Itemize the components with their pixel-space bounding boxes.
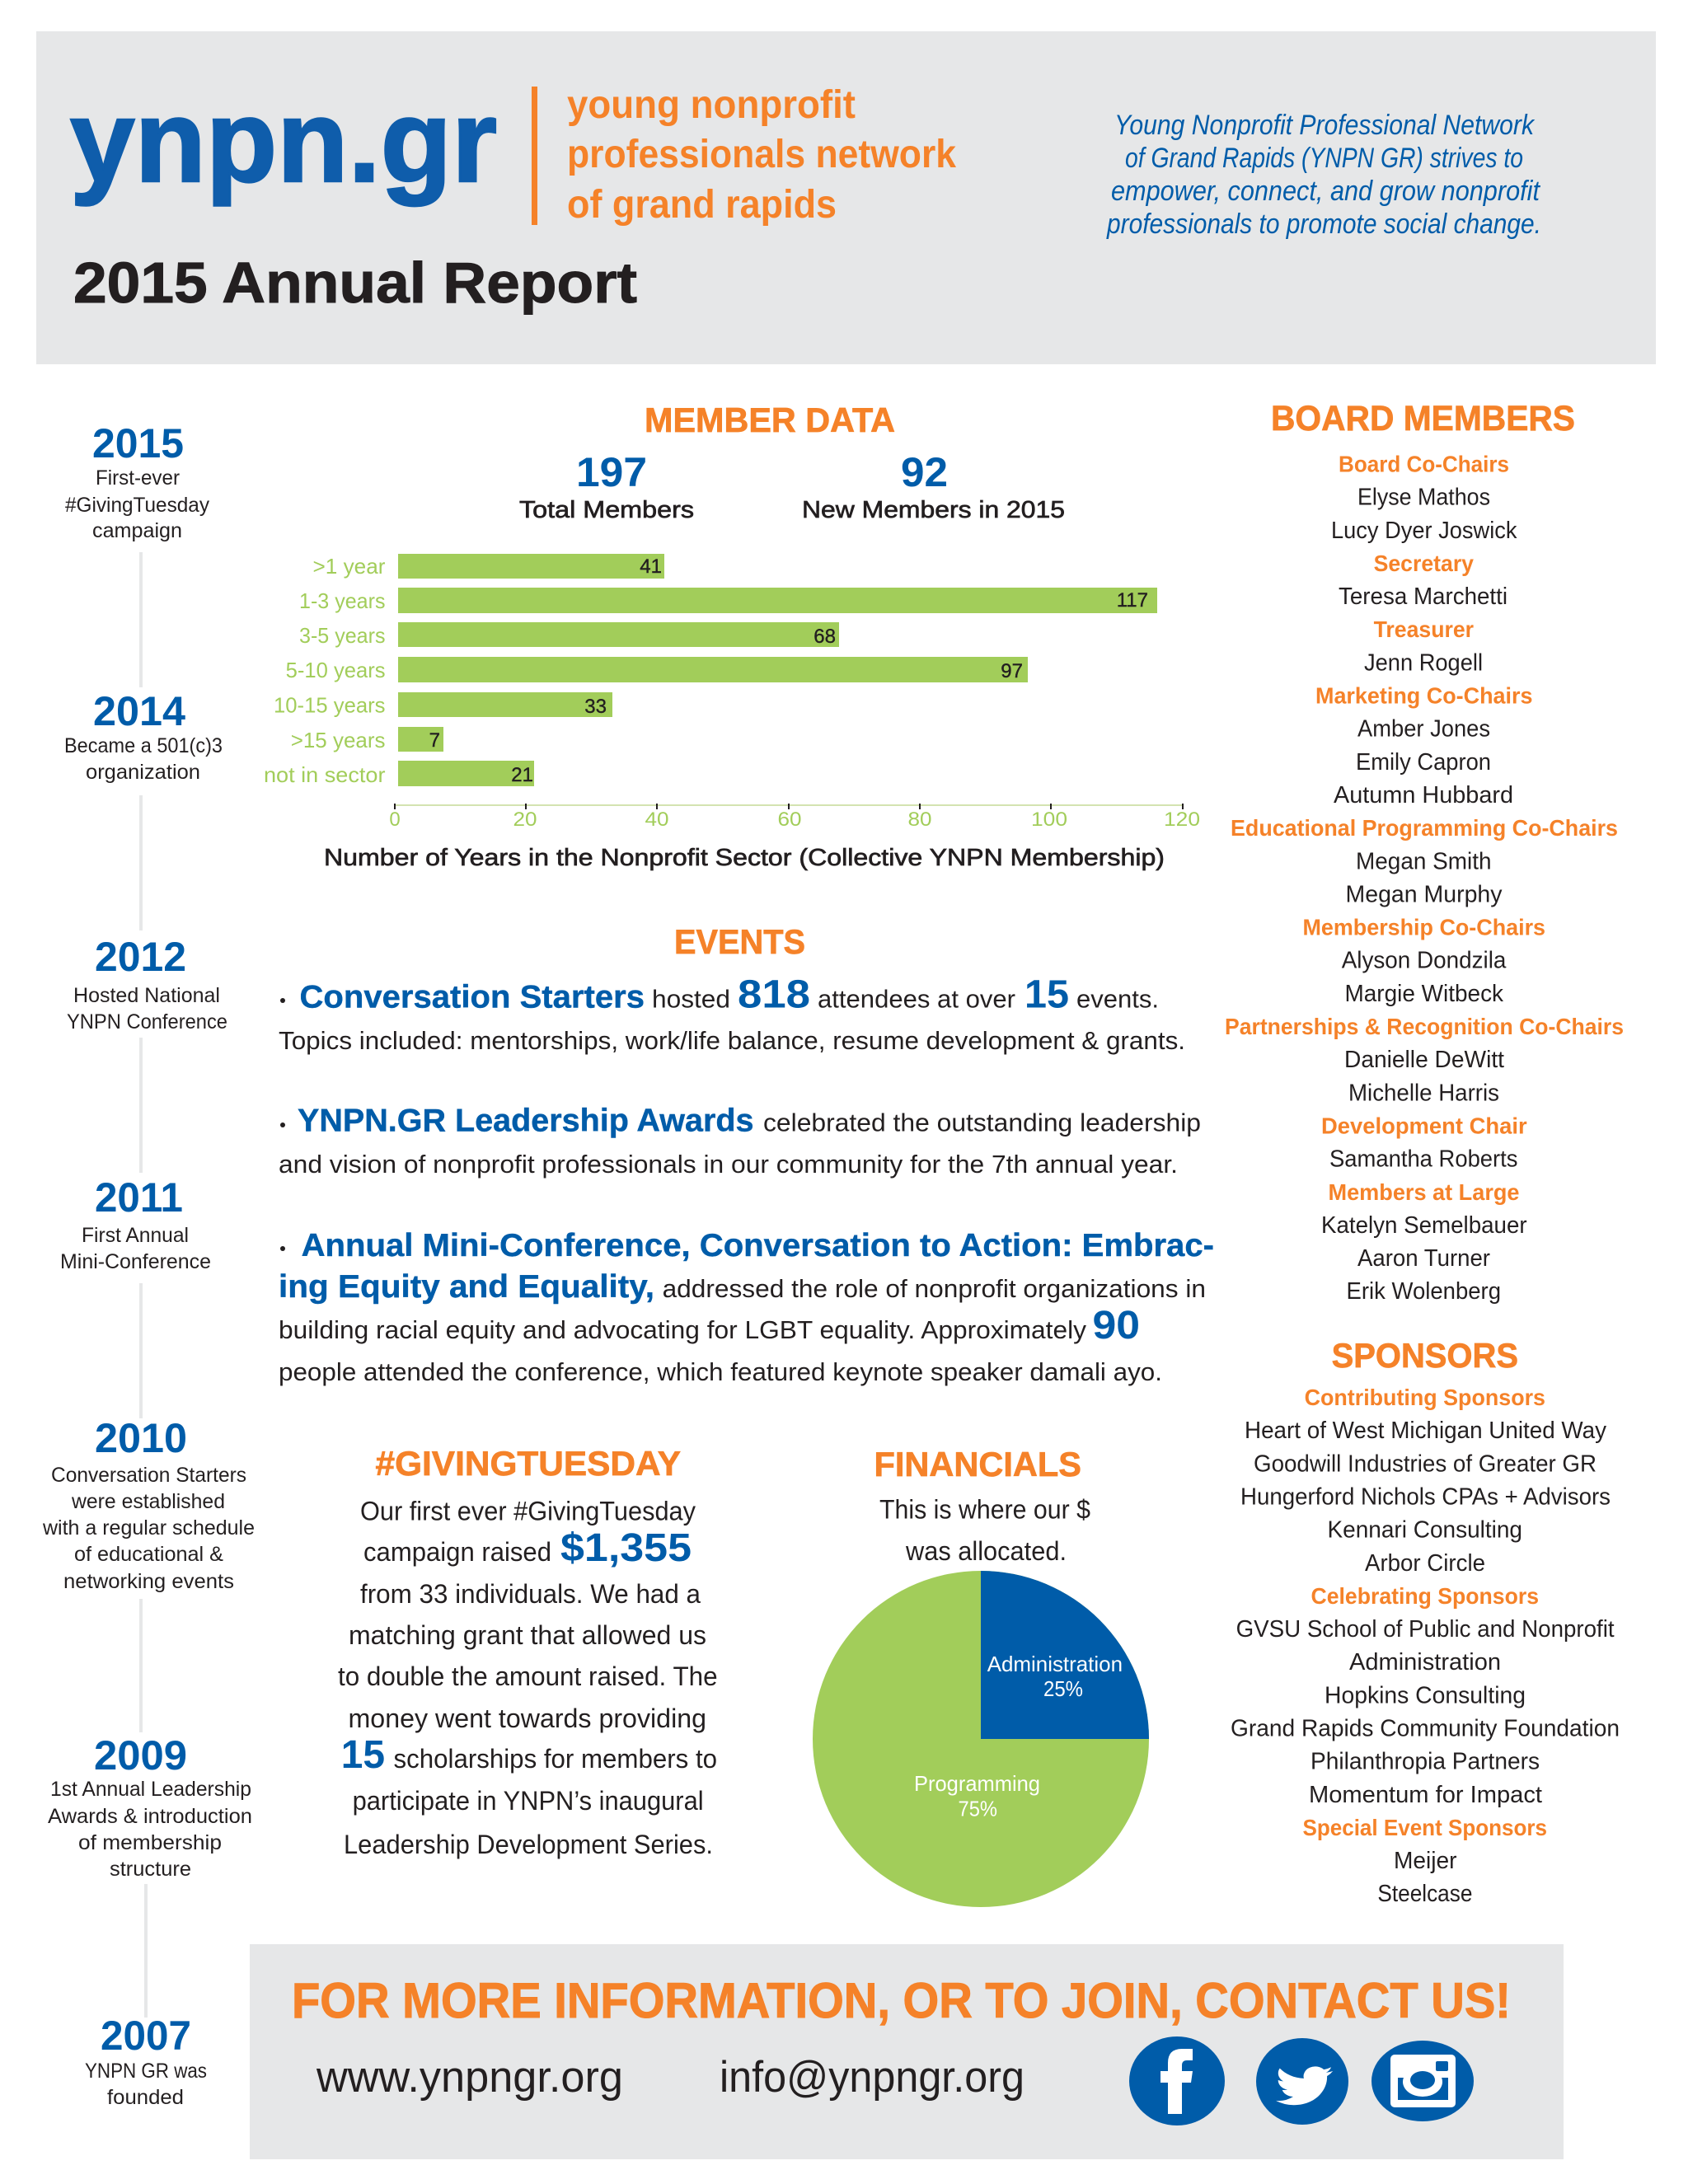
stat: total members: Total Members — [519, 497, 694, 523]
timeline 2011: Mini-Conference — [60, 1250, 211, 1273]
board list: Jenn Rogell — [1364, 649, 1483, 676]
mission statement — [1106, 110, 1541, 240]
bar chart — [264, 554, 1200, 871]
timeline 2010: of educational & — [74, 1543, 223, 1566]
giving tuesday body text: money went towards providing — [348, 1704, 706, 1733]
report title: 2015 Annual Report — [73, 251, 637, 315]
board list: Erik Wolenberg — [1347, 1278, 1501, 1305]
panel: contact footer — [250, 1944, 1564, 2159]
giving tuesday body text: from 33 individuals. We had a — [360, 1579, 701, 1609]
heading: financials: FINANCIALS — [874, 1445, 1081, 1483]
bar labels: 10-15 years — [274, 692, 386, 717]
x axis — [389, 804, 1200, 831]
bar values: 21 — [511, 764, 533, 786]
x axis: 40 — [645, 808, 669, 831]
event: mini-conference: ing Equity and Equality, — [279, 1269, 654, 1305]
event: leadership awards: YNPN.GR Leadership Awards — [298, 1103, 753, 1139]
stat: new members: New Members in 2015 — [802, 497, 1065, 523]
timeline 2009: Awards & introduction — [48, 1805, 252, 1828]
board list: Membership Co-Chairs — [1302, 915, 1545, 940]
x axis: 120 — [1164, 808, 1200, 831]
panel: giving tuesday — [338, 1444, 718, 1859]
x axis: 60 — [778, 808, 801, 831]
board list — [1225, 452, 1624, 1305]
board list: Elyse Mathos — [1357, 485, 1490, 511]
contact heading: FOR MORE INFORMATION, OR TO JOIN, CONTACT US! — [292, 1973, 1511, 2028]
bar labels: not in sector — [264, 762, 386, 787]
x axis: 80 — [908, 808, 931, 831]
heading: events: EVENTS — [674, 922, 805, 961]
timeline 2009: structure — [110, 1858, 191, 1881]
timeline 2011: 2011 — [95, 1174, 183, 1221]
icon: twitter — [1256, 2038, 1348, 2125]
board list: Members at Large — [1329, 1179, 1520, 1205]
timeline 2012: Hosted National — [73, 984, 220, 1007]
timeline 2014: organization — [86, 761, 200, 784]
timeline 2007: YNPN GR was — [85, 2060, 207, 2083]
financials intro text: was allocated. — [905, 1536, 1067, 1566]
pie label: administration: 25% — [1043, 1676, 1083, 1701]
sponsor list: Goodwill Industries of Greater GR — [1254, 1451, 1597, 1477]
giving tuesday body text: Our first ever #GivingTuesday — [360, 1497, 696, 1526]
sponsor list: Contributing Sponsors — [1305, 1385, 1545, 1410]
sponsor list: Administration — [1349, 1649, 1501, 1675]
sponsor list: Philanthropia Partners — [1311, 1749, 1540, 1775]
timeline 2010: were established — [71, 1490, 225, 1513]
logo wordmark: ynpn.gr — [70, 76, 497, 207]
sponsor list: Momentum for Impact — [1309, 1782, 1542, 1808]
sponsor list: Kennari Consulting — [1327, 1517, 1522, 1544]
sponsor list: Hungerford Nichols CPAs + Advisors — [1240, 1483, 1611, 1510]
giving tuesday body text: participate in YNPN’s inaugural — [353, 1786, 704, 1816]
board list: Lucy Dyer Joswick — [1331, 518, 1517, 544]
timeline 2012: YNPN Conference — [67, 1010, 227, 1033]
icon: facebook — [1129, 2036, 1225, 2125]
bar values: 68 — [814, 626, 836, 648]
timeline 2015: #GivingTuesday — [65, 494, 209, 517]
heading: board members: BOARD MEMBERS — [1271, 399, 1575, 438]
board list: Partnerships & Recognition Co-Chairs — [1225, 1014, 1624, 1039]
event: conversation starters: Topics included: mentorships, work/life balance, resume development & grants. — [279, 1026, 1185, 1055]
bars — [398, 554, 1157, 786]
timeline 2015: First-ever — [96, 466, 180, 490]
giving tuesday body text: 15 — [341, 1733, 385, 1777]
board list: Teresa Marchetti — [1339, 583, 1507, 610]
event: conversation starters: attendees at over — [818, 984, 1015, 1014]
timeline 2007: founded — [107, 2086, 184, 2109]
bar labels: >15 years — [291, 728, 386, 752]
timeline 2012: 2012 — [95, 934, 186, 980]
board list: Amber Jones — [1357, 716, 1490, 743]
heading: giving tuesday: #GIVINGTUESDAY — [376, 1444, 681, 1483]
pie label: administration: Administration — [987, 1652, 1123, 1676]
panel: member data — [264, 401, 1200, 871]
mission statement: empower, connect, and grow nonprofit — [1111, 176, 1540, 207]
timeline 2007 — [85, 2013, 207, 2109]
board list: Aaron Turner — [1357, 1245, 1490, 1272]
sponsor list: Special Event Sponsors — [1302, 1815, 1547, 1840]
timeline 2010: Conversation Starters — [51, 1464, 246, 1487]
email: info@ynpngr.org — [720, 2053, 1025, 2102]
mission statement: Young Nonprofit Professional Network — [1114, 110, 1536, 141]
board list: Megan Smith — [1356, 848, 1492, 874]
pie label: administration — [987, 1652, 1123, 1701]
stat: new members — [802, 449, 1065, 523]
event: mini-conference — [279, 1228, 1214, 1386]
event: leadership awards: celebrated the outstanding leadership — [763, 1108, 1201, 1137]
bar values: 41 — [640, 555, 662, 578]
event: mini-conference: Annual Mini-Conference, Conversation to Action: Embrac- — [302, 1228, 1214, 1263]
event: mini-conference: building racial equity and advocating for LGBT equality. Approximately — [279, 1315, 1087, 1344]
timeline 2011 — [60, 1174, 211, 1273]
event: conversation starters: events. — [1076, 984, 1159, 1014]
giving tuesday body text: campaign raised — [363, 1537, 551, 1567]
timeline 2015: 2015 — [92, 420, 184, 466]
stat: total members: 197 — [576, 449, 647, 495]
bar labels — [264, 554, 386, 787]
pie chart — [813, 1571, 1149, 1907]
financials intro text: This is where our $ — [879, 1495, 1090, 1525]
timeline 2015: campaign — [92, 519, 182, 542]
bar labels: 3-5 years — [299, 623, 386, 648]
pie label: programming: 75% — [958, 1797, 997, 1821]
timeline 2012 — [67, 934, 227, 1033]
sponsor list: Grand Rapids Community Foundation — [1231, 1716, 1620, 1742]
sponsor list: Meijer — [1394, 1848, 1457, 1874]
timeline 2014: 2014 — [93, 688, 185, 734]
timeline 2011: First Annual — [82, 1224, 189, 1247]
board list: Development Chair — [1321, 1113, 1527, 1139]
bar values: 7 — [429, 729, 440, 752]
board list: Michelle Harris — [1348, 1080, 1499, 1106]
giving tuesday body text: matching grant that allowed us — [349, 1620, 706, 1650]
timeline 2007: 2007 — [101, 2013, 191, 2059]
panel: financials — [813, 1445, 1149, 1907]
panel: events — [279, 922, 1214, 1386]
timeline 2015 — [65, 420, 209, 542]
pie label: programming: Programming — [914, 1771, 1040, 1796]
board list: Autumn Hubbard — [1334, 782, 1513, 808]
sponsor list: Heart of West Michigan United Way — [1245, 1418, 1606, 1444]
timeline 2010 — [42, 1415, 255, 1593]
timeline 2010: networking events — [63, 1570, 234, 1593]
giving tuesday body text: $1,355 — [560, 1526, 692, 1570]
timeline — [42, 420, 255, 2109]
bar labels: 1-3 years — [299, 588, 386, 613]
board list: Secretary — [1374, 551, 1474, 576]
bar labels: >1 year — [313, 554, 386, 579]
mission statement: of Grand Rapids (YNPN GR) strives to — [1125, 143, 1523, 174]
timeline 2010: 2010 — [95, 1415, 187, 1461]
pie label: programming — [914, 1771, 1040, 1821]
event: conversation starters: Conversation Starters — [300, 979, 645, 1015]
panel: sponsors — [1231, 1336, 1620, 1907]
sponsor list: Hopkins Consulting — [1325, 1682, 1526, 1708]
heading: member data: MEMBER DATA — [645, 401, 895, 439]
bar values: 97 — [1001, 660, 1023, 682]
board list: Katelyn Semelbauer — [1321, 1212, 1527, 1239]
stat: new members: 92 — [901, 449, 948, 495]
board list: Samantha Roberts — [1329, 1146, 1518, 1173]
financials intro text — [879, 1495, 1090, 1566]
event: conversation starters: hosted — [652, 984, 730, 1014]
event: leadership awards: and vision of nonprofit professionals in our community for the 7th annual year. — [279, 1150, 1178, 1179]
giving tuesday body text: scholarships for members to — [394, 1744, 717, 1774]
giving tuesday body text — [338, 1497, 718, 1859]
event: mini-conference: people attended the conference, which featured keynote speaker damali ayo. — [279, 1357, 1162, 1386]
timeline 2009 — [48, 1732, 252, 1881]
icon: instagram — [1372, 2041, 1474, 2121]
sponsor list: Celebrating Sponsors — [1311, 1583, 1539, 1609]
board list: Emily Capron — [1356, 749, 1491, 776]
timeline 2009: 1st Annual Leadership — [50, 1778, 251, 1801]
bar labels: 5-10 years — [286, 658, 386, 682]
board list: Alyson Dondzila — [1342, 948, 1507, 974]
organization name: young nonprofit — [567, 83, 856, 127]
x axis: 0 — [389, 808, 401, 831]
board list: Educational Programming Co-Chairs — [1231, 815, 1618, 841]
organization name: professionals network — [567, 133, 956, 176]
bar values: 117 — [1117, 589, 1148, 612]
board list: Danielle DeWitt — [1344, 1047, 1504, 1073]
giving tuesday body text: Leadership Development Series. — [344, 1830, 713, 1859]
board list: Treasurer — [1374, 616, 1474, 642]
organization name — [532, 83, 956, 227]
timeline 2014 — [64, 688, 223, 784]
website: www.ynpngr.org — [316, 2053, 623, 2102]
sponsor list: Steelcase — [1377, 1881, 1472, 1907]
panel: board members — [1225, 399, 1624, 1305]
bar values: 33 — [584, 696, 607, 718]
bar values — [429, 555, 1148, 786]
sponsor list: GVSU School of Public and Nonprofit — [1236, 1616, 1615, 1643]
heading: sponsors: SPONSORS — [1332, 1336, 1518, 1375]
timeline 2009: of membership — [78, 1831, 222, 1854]
board list: Marketing Co-Chairs — [1315, 682, 1533, 709]
giving tuesday body text: to double the amount raised. The — [338, 1661, 718, 1691]
event: mini-conference: addressed the role of nonprofit organizations in — [663, 1274, 1206, 1303]
event: conversation starters: 15 — [1025, 972, 1069, 1017]
organization name: of grand rapids — [567, 183, 837, 227]
chart caption: Number of Years in the Nonprofit Sector (Collective YNPN Membership) — [324, 845, 1165, 871]
board list: Margie Witbeck — [1345, 981, 1503, 1007]
panel: header — [36, 31, 1656, 364]
event: mini-conference: 90 — [1093, 1304, 1140, 1347]
x axis: 100 — [1031, 808, 1067, 831]
stat: total members — [519, 449, 694, 523]
sponsor list: Arbor Circle — [1365, 1550, 1485, 1577]
board list: Megan Murphy — [1345, 881, 1503, 907]
board list: Board Co-Chairs — [1339, 452, 1509, 476]
x axis: 20 — [513, 808, 537, 831]
sponsor list — [1231, 1385, 1620, 1907]
timeline 2009: 2009 — [94, 1732, 187, 1779]
event: leadership awards — [279, 1103, 1201, 1179]
timeline 2014: Became a 501(c)3 — [64, 734, 223, 757]
mission statement: professionals to promote social change. — [1106, 209, 1541, 240]
event: conversation starters — [279, 972, 1185, 1055]
event: conversation starters: 818 — [738, 972, 810, 1017]
timeline 2010: with a regular schedule — [42, 1516, 255, 1540]
